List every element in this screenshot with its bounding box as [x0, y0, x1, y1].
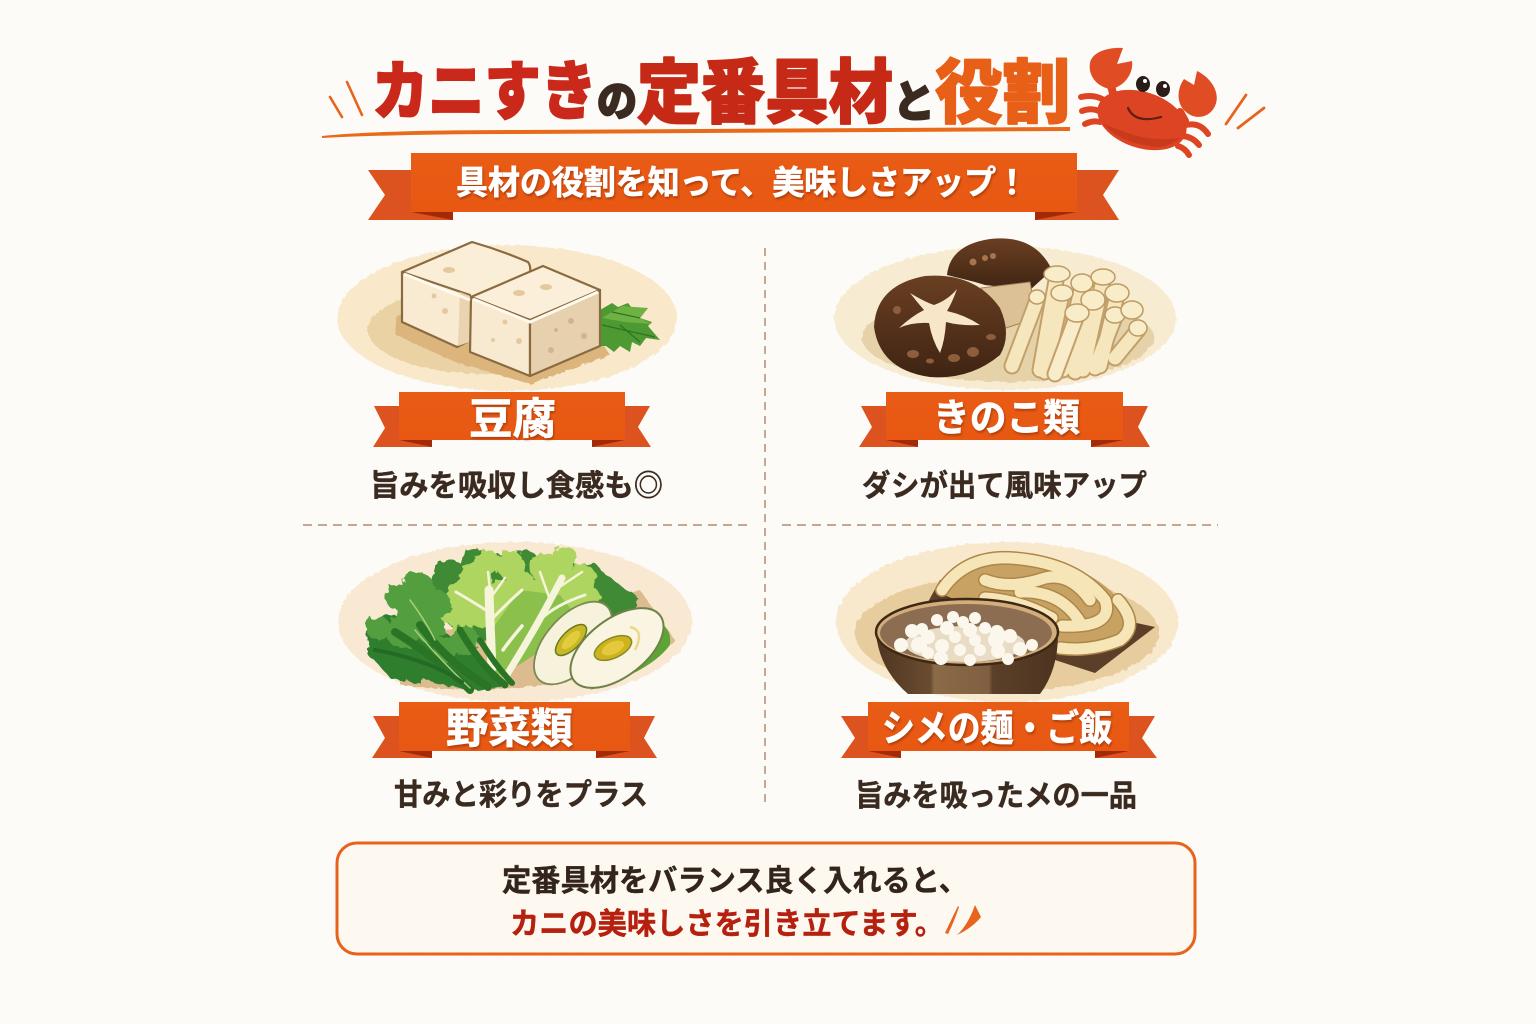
- panel: noodles and rice: [836, 542, 1178, 813]
- panel: tofu: [337, 242, 677, 503]
- left fronds: [365, 615, 505, 692]
- ribbon: きのこ類: きのこ類: [933, 398, 1080, 440]
- subtitle ribbon: 具材の役割を知って、美味しさアップ！: [456, 164, 1028, 201]
- ribbon: きのこ類: [859, 392, 1150, 447]
- slice two: [556, 592, 678, 704]
- icon: callout sparks: [945, 905, 981, 935]
- ribbon: 豆腐: 豆腐: [469, 396, 556, 444]
- callout: [337, 843, 1195, 954]
- illustration: vegetables: [338, 542, 692, 704]
- divider: vertical: [764, 248, 766, 808]
- illustration: noodles and rice: [836, 542, 1178, 702]
- divider: horizontal left: [303, 524, 748, 526]
- ribs: [456, 572, 585, 676]
- illustration: mushrooms: [834, 238, 1176, 390]
- leaf: [600, 303, 660, 352]
- icon: crab: [1081, 48, 1217, 161]
- ribbon: シメの麺・ご飯: シメの麺・ご飯: [882, 708, 1112, 749]
- title: 定番具材: [637, 54, 893, 132]
- illustration: tofu: [337, 242, 677, 391]
- subtitle ribbon: [368, 153, 1119, 220]
- title: [372, 54, 1070, 132]
- callout line two: カニの美味しさを引き立てます。: [510, 908, 944, 941]
- icon: right sparks: [1226, 95, 1264, 128]
- green under-leaf: [590, 623, 670, 690]
- slice one: [519, 588, 627, 698]
- panel: vegetables: [338, 542, 692, 812]
- bowl: [876, 634, 1058, 694]
- title underline: [322, 127, 1070, 138]
- divider: horizontal right: [782, 524, 1218, 526]
- dark greens back: [430, 549, 640, 640]
- panel: mushrooms: [834, 238, 1176, 503]
- caption: vegetables: 甘みと彩りをプラス: [394, 779, 648, 812]
- cabbage leaves: [436, 546, 600, 634]
- title: カニすき: [372, 56, 597, 128]
- ribbon: 豆腐: [373, 392, 651, 447]
- ribbon: 野菜類: 野菜類: [446, 705, 573, 752]
- ribbon: 野菜類: [372, 702, 657, 758]
- caption: noodles and rice: 旨みを吸ったメの一品: [855, 780, 1137, 813]
- callout line one: 定番具材をバランス良く入れると、: [502, 865, 968, 898]
- title: と: [893, 78, 935, 127]
- title: の: [597, 78, 637, 125]
- title: 役割: [935, 54, 1070, 132]
- caption: tofu: 旨みを吸収し食感も◎: [370, 470, 663, 503]
- icon: left sparks: [330, 82, 362, 117]
- ribbon: シメの麺・ご飯: [841, 702, 1157, 758]
- caption: mushrooms: ダシが出て風味アップ: [862, 469, 1147, 503]
